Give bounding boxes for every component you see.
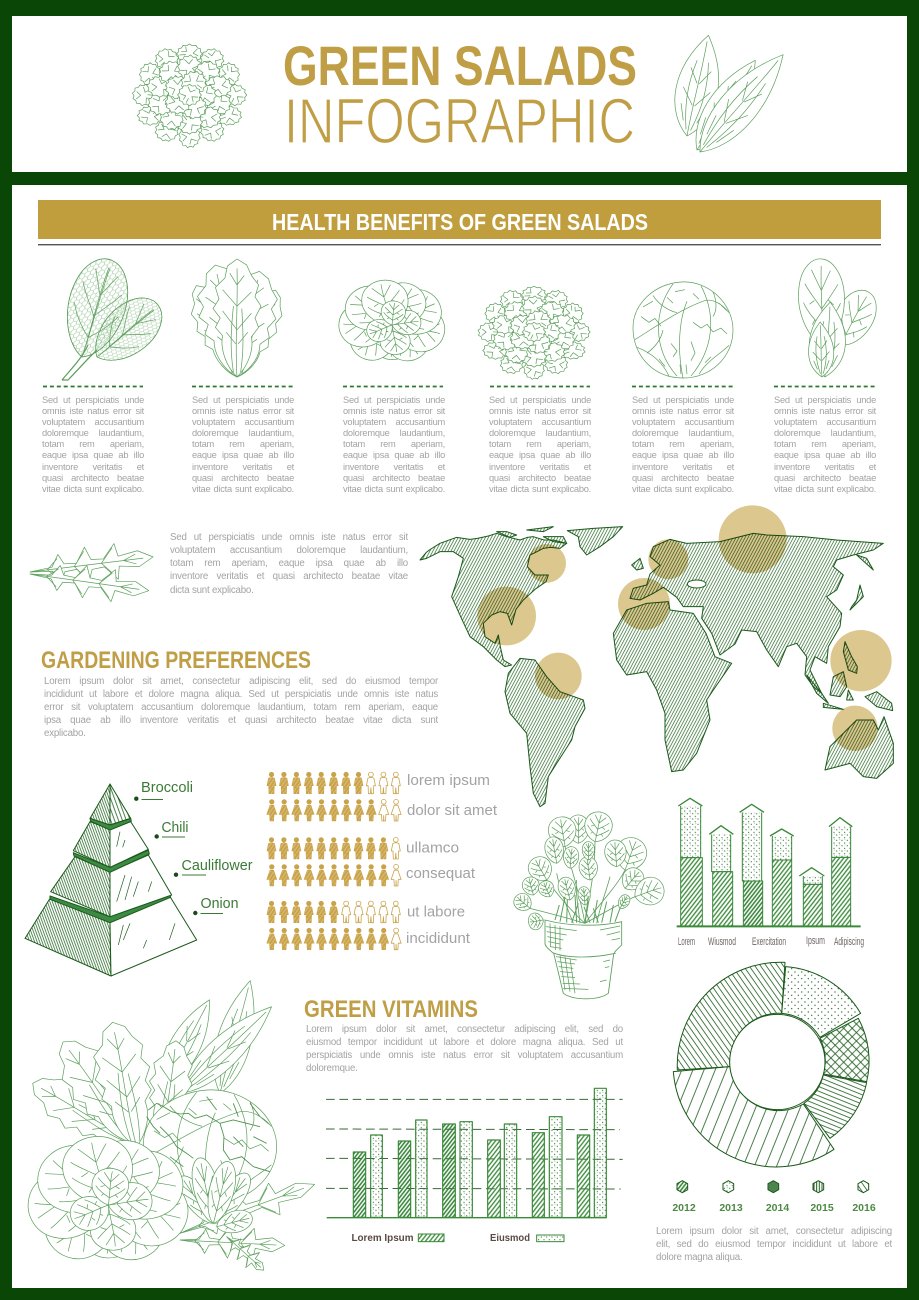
- text: donut caption: elit, sed do eiusmod tempor incididunt ut labore et: [656, 1238, 892, 1250]
- text: column 4: eaque ipsa quae ab illo: [489, 450, 591, 460]
- section banner: HEALTH BENEFITS OF GREEN SALADS: [272, 209, 648, 235]
- icon: cabbage: [633, 282, 733, 378]
- icon: frisee lettuce header: [129, 40, 247, 153]
- vitamins chart legend: Eiusmod: [490, 1232, 530, 1244]
- title: [283, 34, 637, 157]
- text: column 5: totam rem aperiam,: [632, 439, 734, 449]
- text: gardening preferences body: [44, 676, 438, 739]
- text: column 3: inventore veritatis et: [343, 462, 445, 472]
- icon: frisee: [475, 283, 591, 384]
- text: column 4: totam rem aperiam,: [489, 439, 591, 449]
- text: donut caption: dolore magna aliqua.: [656, 1252, 742, 1262]
- text: column 3: eaque ipsa quae ab illo: [343, 450, 445, 460]
- pictogram row: ullamco: [267, 837, 400, 859]
- text: column 4: quasi architecto beatae: [489, 473, 591, 483]
- icon: arugula leaf: [28, 539, 155, 607]
- vitamins chart legend: Lorem Ipsum: [352, 1232, 414, 1244]
- donut legend icons: [677, 1181, 869, 1193]
- icon: bok choy: [797, 258, 885, 378]
- text: column 6: omnis iste natus error sit: [774, 406, 876, 416]
- arrow chart labels: Adipiscing: [834, 936, 864, 948]
- text: column 6: doloremque laudantium,: [774, 428, 876, 438]
- text: gardening preferences body: ipsa quae ab illo inventore veritatis et quasi architecto beatae vitae dicta sunt: [44, 715, 438, 726]
- text: gardening preferences body: Lorem ipsum dolor sit amet, consectetur adipiscing elit, sed do eiusmod tempor: [44, 676, 438, 686]
- arrow chart labels: Wiusmod: [708, 936, 736, 948]
- text: column 6: [774, 395, 876, 494]
- donut legend years: [672, 1202, 876, 1214]
- text: column 6: voluptatem accusantium: [774, 417, 876, 427]
- text: column 2: [192, 395, 294, 494]
- text: column 3: quasi architecto beatae: [343, 473, 445, 483]
- text: arugula description: dicta sunt explicabo.: [170, 585, 254, 596]
- text: column 2: Sed ut perspiciatis unde: [192, 395, 294, 405]
- pyramid labels: Onion: [200, 895, 238, 912]
- text: column 3: doloremque laudantium,: [343, 428, 445, 438]
- world map: [420, 527, 893, 807]
- text: green vitamins body: eiusmod tempor incididunt ut labore et dolore magna aliqua. Sed ut: [306, 1037, 623, 1048]
- text: column 2: voluptatem accusantium: [192, 417, 294, 427]
- text: column 2: inventore veritatis et: [192, 462, 294, 472]
- dashed dividers: [43, 386, 875, 388]
- map location markers: [477, 505, 892, 751]
- title: GREEN SALADS: [283, 34, 637, 97]
- icon: potted spinach plant: [511, 809, 668, 999]
- text: arugula description: [170, 532, 408, 596]
- text: column 1: [42, 395, 144, 494]
- text: column 1: doloremque laudantium,: [42, 428, 144, 438]
- text: green vitamins body: doloremque.: [306, 1063, 358, 1074]
- icon: spinach: [336, 275, 450, 368]
- donut chart: [673, 962, 869, 1167]
- pictogram labels: ut labore: [407, 904, 465, 920]
- text: column 4: vitae dicta sunt explicabo.: [489, 484, 591, 494]
- text: column 6: quasi architecto beatae: [774, 473, 876, 483]
- text: column 3: vitae dicta sunt explicabo.: [343, 484, 445, 494]
- text: gardening preferences body: error sit voluptatem accusantium doloremque laudantium, totam rem aperiam, eaque: [44, 702, 438, 713]
- pyramid chart: [25, 784, 197, 976]
- pictogram labels: dolor sit amet: [407, 802, 498, 819]
- arrow chart labels: Ipsum: [806, 935, 825, 947]
- section banner: [38, 200, 881, 245]
- text: column 2: totam rem aperiam,: [192, 439, 294, 449]
- text: column 1: omnis iste natus error sit: [42, 406, 144, 416]
- text: column 2: omnis iste natus error sit: [192, 406, 294, 416]
- pyramid labels: [134, 779, 252, 915]
- text: arugula description: voluptatem accusantium doloremque laudantium,: [170, 545, 408, 556]
- icon: romaine: [180, 259, 292, 384]
- pictogram row: dolor sit amet: [267, 799, 401, 821]
- text: column 1: voluptatem accusantium: [42, 417, 144, 427]
- text: column 5: doloremque laudantium,: [632, 428, 734, 438]
- pictogram labels: incididunt: [406, 930, 471, 947]
- donut legend years: 2013: [719, 1202, 743, 1214]
- text: green vitamins body: [306, 1024, 624, 1074]
- pictogram row: incididunt: [267, 928, 401, 950]
- text: column 4: Sed ut perspiciatis unde: [489, 395, 591, 405]
- panel: header: [12, 16, 907, 172]
- text: column 3: voluptatem accusantium: [343, 417, 445, 427]
- pyramid labels: Chili: [162, 819, 188, 836]
- pictogram row: lorem ipsum: [267, 772, 400, 794]
- text: arugula description: inventore veritatis et quasi architecto beatae vitae: [170, 571, 408, 582]
- text: gardening preferences body: explicabo.: [44, 728, 86, 739]
- text: column 6: totam rem aperiam,: [774, 439, 876, 449]
- text: column 6: vitae dicta sunt explicabo.: [774, 484, 876, 494]
- text: column 1: quasi architecto beatae: [42, 473, 144, 483]
- arrow bar chart: [677, 798, 861, 926]
- text: column 6: eaque ipsa quae ab illo: [774, 450, 876, 460]
- text: column 5: vitae dicta sunt explicabo.: [632, 484, 734, 494]
- text: column 1: Sed ut perspiciatis unde: [42, 395, 144, 405]
- text: column 3: Sed ut perspiciatis unde: [343, 395, 445, 405]
- pyramid labels: Cauliflower: [182, 857, 252, 874]
- pictogram row: consequat: [267, 864, 401, 886]
- text: column 3: [343, 395, 446, 494]
- donut legend years: 2016: [852, 1202, 876, 1214]
- text: column 3: totam rem aperiam,: [343, 439, 445, 449]
- vitamins bar chart: [326, 1088, 623, 1218]
- heading: green vitamins: GREEN VITAMINS: [304, 996, 478, 1023]
- pictogram labels: [406, 772, 498, 947]
- text: column 5: Sed ut perspiciatis unde: [632, 395, 734, 405]
- text: column 3: omnis iste natus error sit: [343, 406, 445, 416]
- text: column 2: quasi architecto beatae: [192, 473, 294, 483]
- text: gardening preferences body: incididunt ut labore et dolore magna aliqua. Sed ut perspiciatis unde omnis iste natus: [44, 689, 438, 700]
- text: column 5: omnis iste natus error sit: [632, 406, 734, 416]
- text: green vitamins body: Lorem ipsum dolor sit amet, consectetur adipiscing elit, sed do: [306, 1024, 623, 1034]
- text: green vitamins body: perspiciatis unde omnis iste natus error sit voluptatem accusantium: [306, 1050, 623, 1061]
- text: arugula description: totam rem aperiam, eaque ipsa quae ab illo: [170, 558, 408, 569]
- text: column 2: eaque ipsa quae ab illo: [192, 450, 294, 460]
- text: donut caption: Lorem ipsum dolor sit amet, consectetur adipiscing: [656, 1226, 892, 1236]
- text: column 4: inventore veritatis et: [489, 462, 591, 472]
- text: column 4: omnis iste natus error sit: [489, 406, 591, 416]
- text: donut caption: [656, 1226, 892, 1262]
- pyramid labels: Broccoli: [141, 779, 193, 796]
- pictogram labels: consequat: [406, 865, 476, 882]
- icon: chard: [55, 252, 173, 380]
- text: column 2: vitae dicta sunt explicabo.: [192, 484, 294, 494]
- arrow chart labels: Exercitation: [752, 936, 786, 948]
- text: column 6: Sed ut perspiciatis unde: [774, 395, 876, 405]
- text: column 1: vitae dicta sunt explicabo.: [42, 484, 144, 494]
- text: column 2: doloremque laudantium,: [192, 428, 294, 438]
- text: column 5: eaque ipsa quae ab illo: [632, 450, 734, 460]
- text: column 4: [489, 395, 592, 494]
- text: column 5: inventore veritatis et: [632, 462, 734, 472]
- vitamins chart legend: [352, 1232, 564, 1244]
- text: column 4: voluptatem accusantium: [489, 417, 591, 427]
- icon: endive header: [667, 31, 798, 164]
- text: column 4: doloremque laudantium,: [489, 428, 591, 438]
- heading: gardening preferences: GARDENING PREFERENCES: [41, 647, 311, 674]
- text: arugula description: Sed ut perspiciatis unde omnis iste natus error sit: [170, 532, 408, 542]
- text: column 5: quasi architecto beatae: [632, 473, 734, 483]
- text: column 1: inventore veritatis et: [42, 462, 144, 472]
- arrow chart labels: Lorem: [678, 936, 695, 948]
- donut legend years: 2012: [672, 1202, 696, 1214]
- text: column 1: eaque ipsa quae ab illo: [42, 450, 144, 460]
- donut legend years: 2015: [810, 1202, 834, 1214]
- text: column 5: [632, 395, 734, 494]
- text: column 5: voluptatem accusantium: [632, 417, 734, 427]
- pictogram labels: ullamco: [406, 840, 459, 856]
- text: column 1: totam rem aperiam,: [42, 439, 144, 449]
- text: column 6: inventore veritatis et: [774, 462, 876, 472]
- title: INFOGRAPHIC: [284, 85, 635, 157]
- pictogram labels: lorem ipsum: [407, 772, 490, 789]
- arrow chart labels: [678, 935, 864, 948]
- illustration: salad bouquet: [21, 976, 320, 1278]
- pictogram row: ut labore: [267, 901, 400, 923]
- donut legend years: 2014: [766, 1202, 789, 1214]
